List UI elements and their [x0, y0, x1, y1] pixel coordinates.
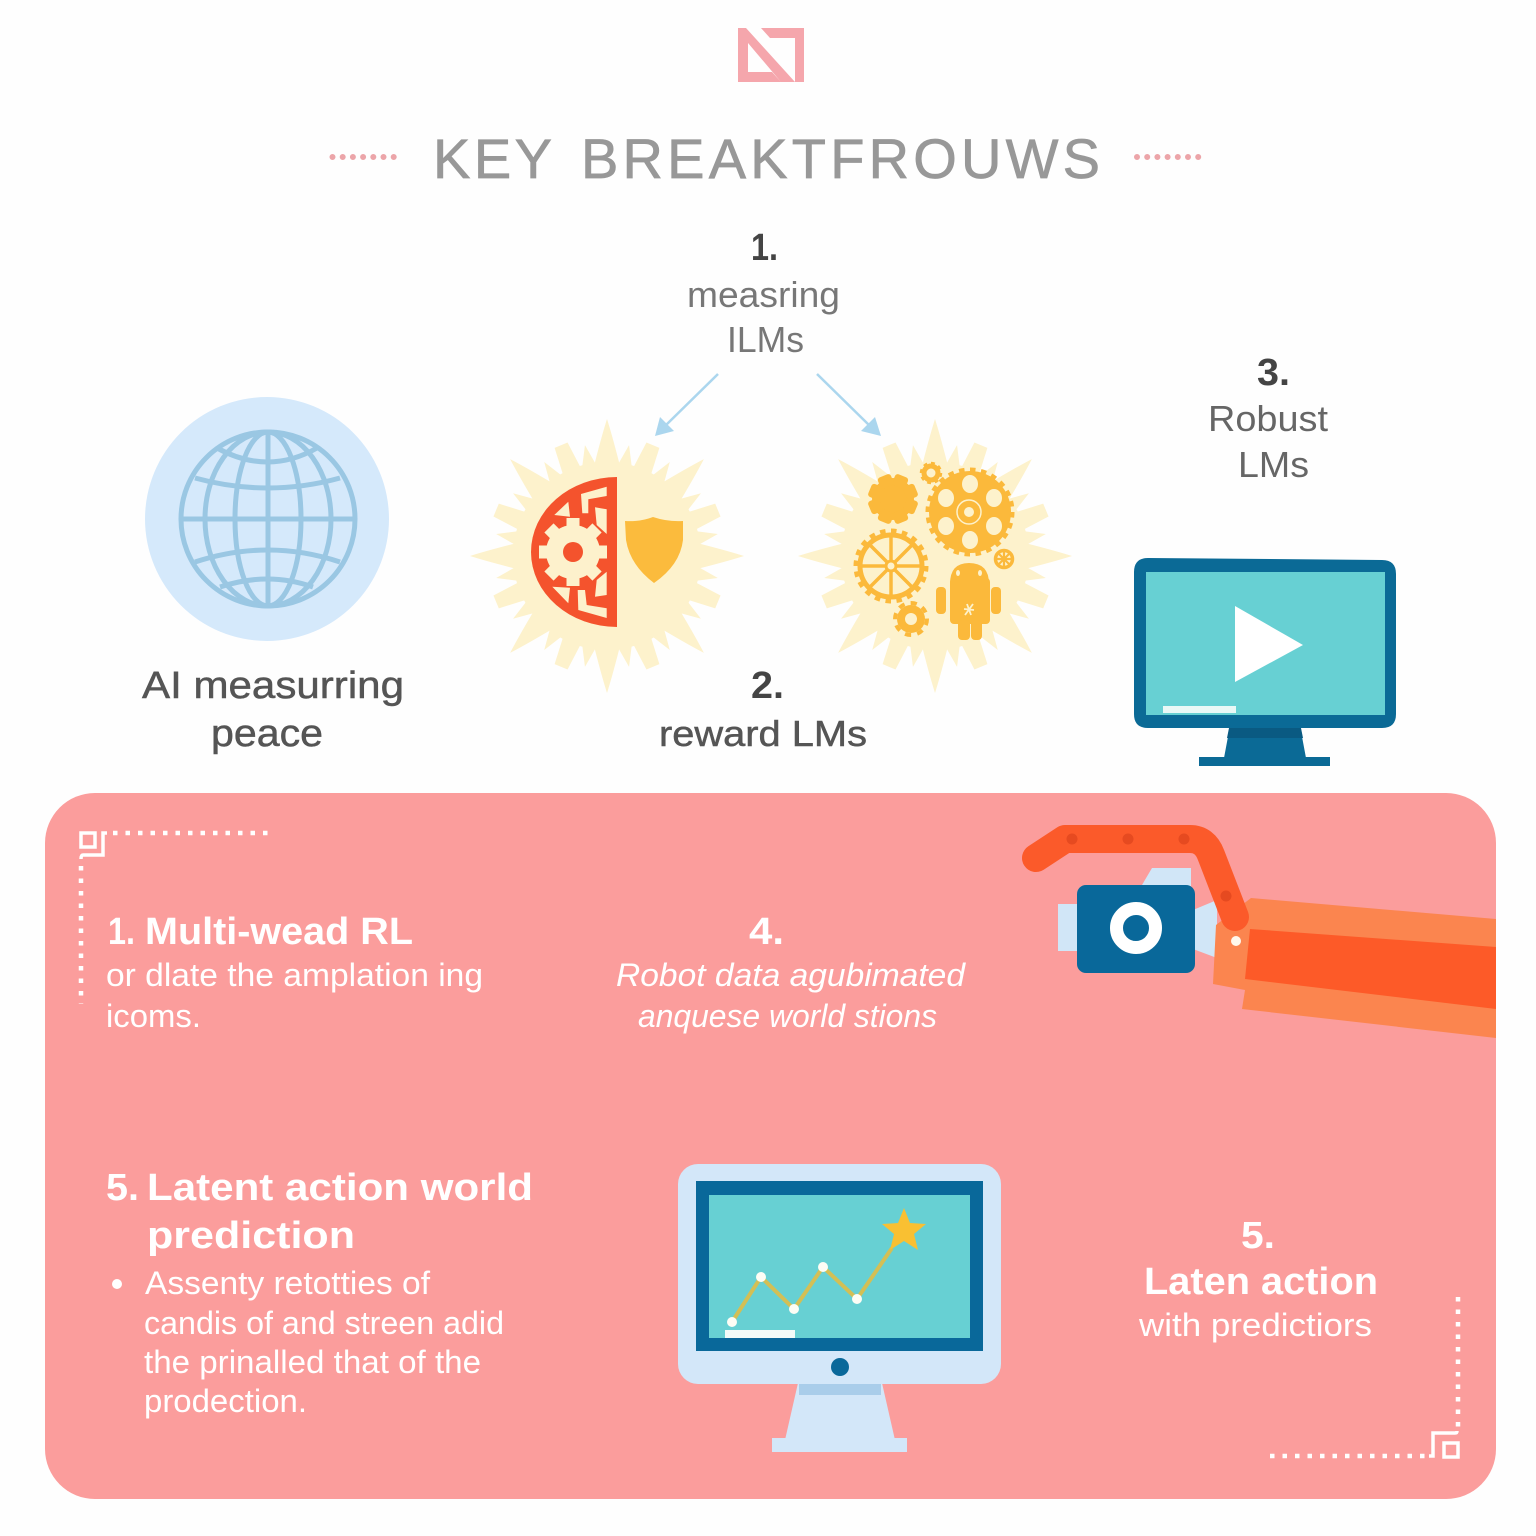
icon: camera — [1058, 868, 1217, 973]
text: item 4: anquese world stions — [638, 998, 937, 1034]
label: 3. Robust LMs: LMs — [1238, 444, 1309, 485]
label: 2. reward LMs: reward LMs — [659, 713, 867, 754]
text: item 5 latent action: prediction — [147, 1215, 355, 1257]
label: AI measurring peace: AI measurring — [142, 665, 404, 707]
text: item 5 latent action: Latent action world — [147, 1167, 533, 1209]
icon: robot arm — [1036, 834, 1496, 1038]
corner ornament: bottom right — [1270, 1297, 1458, 1457]
text: item 5 laten action — [1138, 1215, 1378, 1343]
text: item 5 latent action: the prinalled that of the — [144, 1344, 481, 1380]
title: BREAKTFROUWS — [581, 127, 1100, 190]
text: item 4: 4. — [749, 911, 784, 953]
text: item 5 laten action: Laten action — [1144, 1261, 1378, 1303]
label: 3. Robust LMs: 3. — [1257, 352, 1290, 394]
icon: chart monitor — [678, 1164, 1001, 1452]
plain gear — [867, 473, 919, 525]
shield — [625, 517, 683, 583]
icon: brain and shield sunburst — [460, 409, 754, 703]
label: 3. Robust LMs — [1208, 352, 1328, 485]
label: 1. measring ILMs: ILMs — [727, 319, 804, 360]
text: item 4 — [616, 911, 966, 1034]
spoked wheel — [856, 531, 926, 601]
label: 3. Robust LMs: Robust — [1208, 398, 1328, 439]
text: item 1: Multi-wead RL — [145, 911, 413, 953]
tiny gear — [921, 463, 941, 483]
text: item 5 latent action — [106, 1167, 533, 1419]
label: 1. measring ILMs: measring — [687, 274, 840, 315]
text: item 5 latent action: prodection. — [144, 1383, 307, 1419]
line chart — [725, 1248, 892, 1338]
corner ornament: top left — [81, 833, 270, 1004]
title: KEY — [433, 127, 552, 190]
label: 2. reward LMs — [659, 665, 867, 754]
icon: globe — [145, 397, 389, 641]
tiny wheel — [996, 550, 1012, 568]
text: item 1: icoms. — [106, 998, 201, 1034]
text: item 1: 1. — [108, 911, 135, 953]
small gear — [895, 603, 927, 635]
text: item 5 laten action: with predictiors — [1138, 1307, 1372, 1343]
android robot — [936, 563, 1001, 640]
text: item 5 laten action: 5. — [1241, 1215, 1275, 1257]
label: 2. reward LMs: 2. — [751, 665, 784, 707]
large gear — [928, 470, 1012, 554]
icon: video monitor — [1134, 558, 1396, 766]
arrow: left — [655, 374, 718, 436]
text: item 4: Robot data agubimated — [616, 957, 966, 993]
arrow: right — [817, 374, 881, 436]
text: item 1: or dlate the amplation ing — [106, 957, 483, 993]
icon: star — [882, 1208, 926, 1250]
logo — [738, 28, 804, 82]
label: AI measurring peace: peace — [211, 713, 323, 755]
panel: details — [45, 793, 1496, 1499]
label: 1. measring ILMs: 1. — [751, 227, 778, 269]
label: AI measurring peace — [142, 665, 404, 755]
icon: gears and android sunburst — [788, 409, 1082, 703]
label: 1. measring ILMs — [687, 227, 840, 360]
text: item 1 — [106, 911, 483, 1034]
text: item 5 latent action: candis of and streen adid — [144, 1305, 504, 1341]
text: item 5 latent action: 5. — [106, 1167, 139, 1209]
text: item 5 latent action: Assenty retotties of — [145, 1265, 430, 1301]
brain half with gear — [531, 477, 617, 627]
title — [332, 127, 1200, 190]
